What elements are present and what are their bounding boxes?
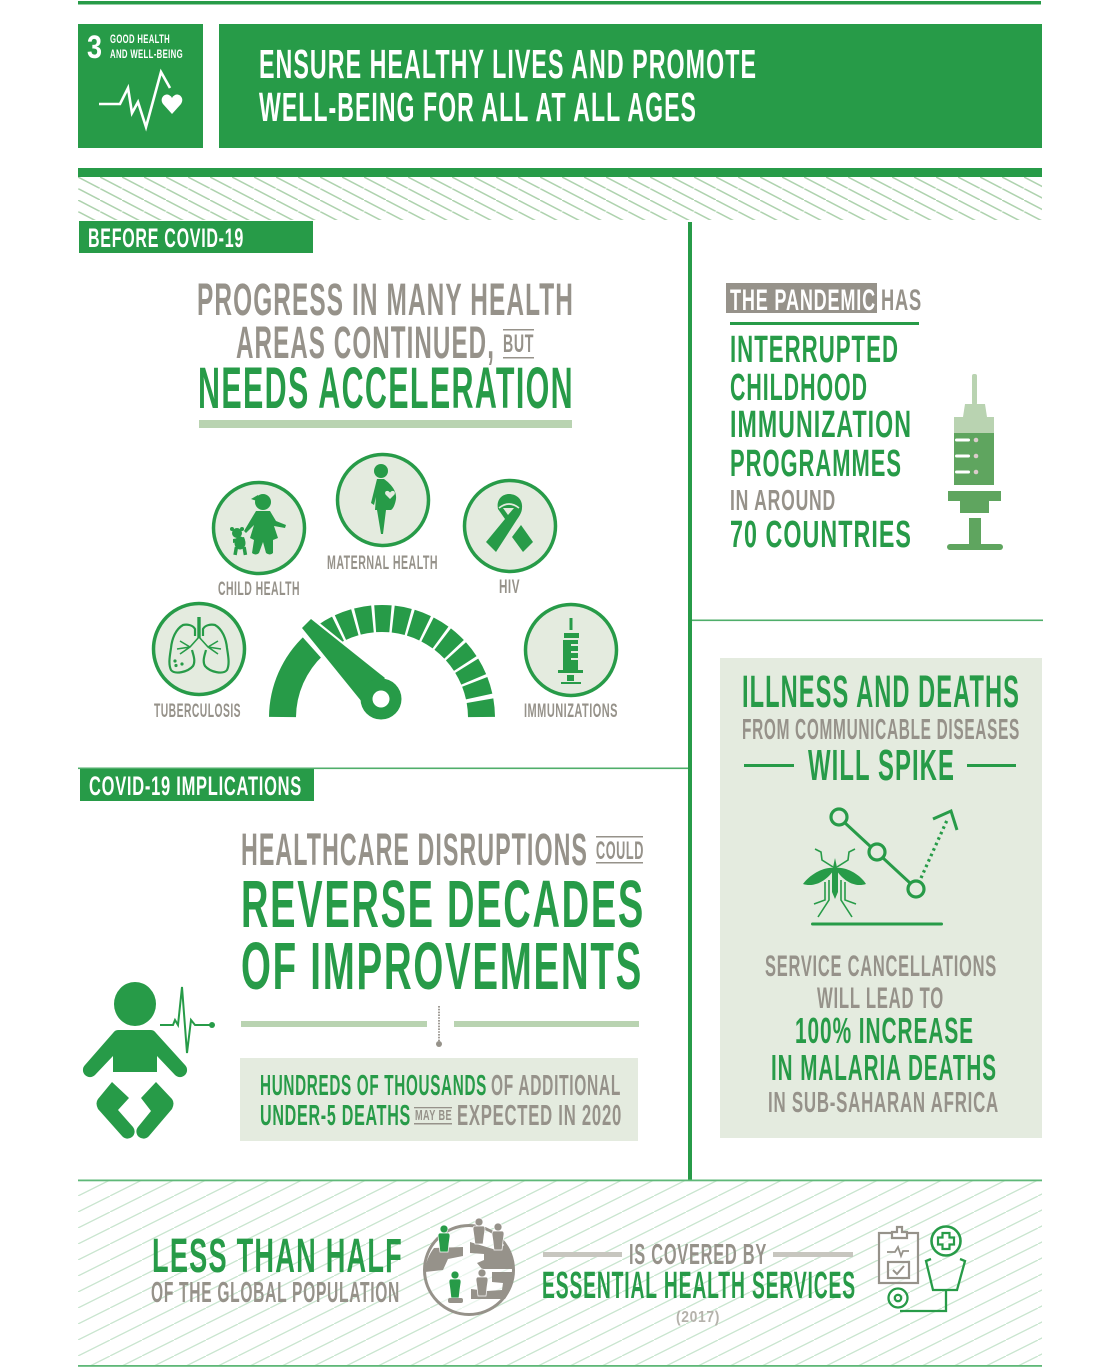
SDG 3 badge xyxy=(78,24,203,148)
section tag: COVID-19 implications: COVID-19 IMPLICATIONS xyxy=(89,771,302,801)
labels: health areas: TUBERCULOSIS xyxy=(154,701,241,722)
icon: child health xyxy=(214,482,304,574)
divider with pin xyxy=(241,1006,639,1047)
text: is covered by essential health services xyxy=(542,1239,856,1326)
icon: trend chart xyxy=(811,809,957,926)
text: is covered by essential health services: IS COVERED BY xyxy=(629,1239,767,1271)
gauge xyxy=(282,616,482,720)
icon: immunizations syringe xyxy=(526,604,616,696)
heading: reverse decades of improvements xyxy=(241,824,645,1004)
text: interrupted childhood immunization: IMMUNIZATION xyxy=(730,404,912,446)
heading: illness and deaths: WILL SPIKE xyxy=(808,741,955,790)
labels: health areas: IMMUNIZATIONS xyxy=(524,701,618,722)
heading: progress in many health areas: AREAS CONTINUED, xyxy=(236,317,495,368)
heading: progress in many health areas: PROGRESS IN MANY HEALTH xyxy=(197,274,574,325)
callout: under-5 deaths: MAY BE xyxy=(415,1107,452,1124)
section dividers xyxy=(78,222,1043,1180)
text: interrupted childhood immunization xyxy=(730,329,912,556)
callout: under-5 deaths: OF ADDITIONAL xyxy=(491,1070,621,1102)
title banner: WELL-BEING FOR ALL AT ALL AGES xyxy=(259,84,697,130)
labels: health areas: HIV xyxy=(499,577,520,598)
icon: stethoscope xyxy=(888,1226,965,1311)
section tag: COVID-19 implications xyxy=(80,769,314,801)
callout: under-5 deaths: HUNDREDS OF THOUSANDS xyxy=(260,1070,487,1102)
title banner xyxy=(219,24,1042,148)
text: malaria deaths xyxy=(765,950,999,1119)
heading: reverse decades of improvements: COULD xyxy=(596,837,644,865)
labels: health areas: CHILD HEALTH xyxy=(218,579,300,600)
icon: people on globe xyxy=(438,1218,504,1303)
panel: illness and deaths will spike xyxy=(720,658,1042,1138)
heading: reverse decades of improvements: REVERSE DECADES xyxy=(241,867,645,942)
icon: HIV ribbon xyxy=(464,480,556,572)
icon: tuberculosis lungs xyxy=(154,604,244,694)
text: interrupted childhood immunization: IN AROUND xyxy=(730,485,836,517)
SDG 3 badge: 3 xyxy=(87,29,102,65)
callout: under-5 deaths: EXPECTED IN 2020 xyxy=(457,1100,622,1132)
text: interrupted childhood immunization: INTERRUPTED xyxy=(730,329,899,371)
labels: health areas xyxy=(154,553,618,722)
callout: under-5 deaths xyxy=(240,1058,638,1141)
text: less than half: LESS THAN HALF xyxy=(152,1230,403,1283)
icon: teddy bear xyxy=(230,527,247,555)
heading: progress in many health areas xyxy=(197,274,574,428)
icon: maternal health xyxy=(338,454,428,546)
text: malaria deaths: WILL LEAD TO xyxy=(817,982,944,1015)
labels: health areas: MATERNAL HEALTH xyxy=(327,553,438,574)
icon: baby with heartbeat xyxy=(83,982,215,1139)
heading: reverse decades of improvements: HEALTHCARE DISRUPTIONS xyxy=(241,824,588,875)
heading: illness and deaths xyxy=(742,666,1020,790)
text: less than half xyxy=(151,1230,403,1309)
text: interrupted childhood immunization: 70 COUNTRIES xyxy=(730,514,912,556)
heading: the pandemic has xyxy=(726,283,922,325)
heading: reverse decades of improvements: OF IMPROVEMENTS xyxy=(241,929,643,1004)
icon: clipboard xyxy=(879,1227,918,1283)
icon: globe with people xyxy=(424,1218,514,1314)
heading: progress in many health areas: BUT xyxy=(503,330,534,358)
text: is covered by essential health services: (2017) xyxy=(676,1309,720,1326)
text: interrupted childhood immunization: PROGRAMMES xyxy=(730,443,902,485)
text: malaria deaths: 100% INCREASE xyxy=(795,1010,974,1051)
SDG 3 badge: AND WELL-BEING xyxy=(110,47,183,61)
heading: the pandemic has: HAS xyxy=(881,284,922,317)
icon: mosquito xyxy=(803,849,866,917)
icon: large syringe xyxy=(947,374,1003,550)
panel: before COVID-19 xyxy=(79,221,618,722)
title banner: ENSURE HEALTHY LIVES AND PROMOTE xyxy=(259,41,757,87)
heading: progress in many health areas: NEEDS ACCELERATION xyxy=(198,356,574,421)
SDG 3 badge: GOOD HEALTH xyxy=(110,32,170,46)
text: interrupted childhood immunization: CHILDHOOD xyxy=(730,367,868,409)
panel: pandemic interrupted immunization xyxy=(726,283,1003,556)
panel: essential health services coverage xyxy=(78,1180,1042,1367)
callout: under-5 deaths: UNDER-5 DEATHS xyxy=(260,1100,411,1132)
section tag: before COVID-19: BEFORE COVID-19 xyxy=(88,223,244,253)
text: less than half: OF THE GLOBAL POPULATION xyxy=(151,1277,400,1309)
panel: COVID-19 implications xyxy=(80,769,645,1141)
heading: the pandemic has: THE PANDEMIC xyxy=(730,284,876,317)
